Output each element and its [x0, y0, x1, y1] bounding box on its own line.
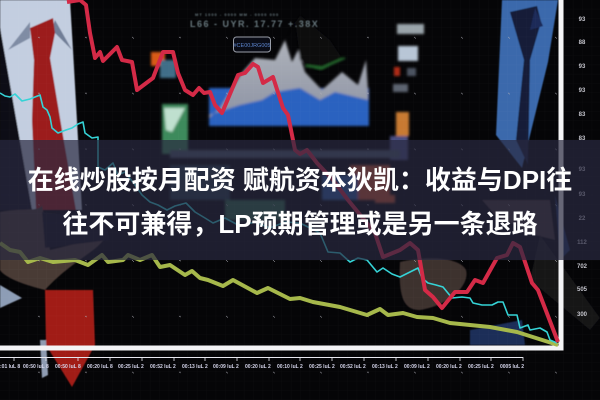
x axis: 00:20 luL 2 [245, 364, 271, 370]
x axis: 00:13 luL 2 [182, 364, 208, 370]
title: 往不可兼得，LP预期管理或是另一条退路 [62, 209, 538, 239]
y axis labels: 702 [577, 264, 588, 270]
x axis: 00:20 luL 2 [436, 364, 462, 370]
y axis labels: 88 [579, 40, 586, 46]
x axis: 00:20 luL 8 [87, 364, 113, 370]
y axis labels: 93 [579, 192, 586, 198]
line: red [67, 0, 558, 342]
x axis: 00:50 luL 8 [23, 364, 49, 370]
y axis labels: 93 [579, 167, 586, 173]
trading screen [151, 15, 424, 220]
y axis labels: 112 [577, 240, 587, 246]
y axis labels: 93 [579, 64, 586, 70]
screen readout: MT 1000 - 0000 MM - 0000 000 [195, 12, 279, 17]
x axis: 00:25 luL 2 [468, 364, 494, 370]
y axis labels [577, 17, 588, 318]
x axis: :01 luL 8 [0, 364, 20, 370]
y axis labels: 93 [579, 88, 586, 94]
right businessman [400, 0, 600, 345]
line: green [0, 243, 558, 345]
screen readout [190, 12, 319, 29]
left businessman [0, 0, 110, 387]
y axis labels: 83 [579, 136, 586, 142]
x axis: 00:13 luL 2 [372, 364, 398, 370]
x axis: 00:10 luL 2 [277, 364, 303, 370]
chart tag [234, 37, 270, 52]
x axis [0, 357, 524, 370]
y axis labels: 22 [579, 216, 586, 222]
x axis: 00:25 luL 2 [309, 364, 335, 370]
x axis: 00:09 luL 2 [404, 364, 430, 370]
title: 在线炒股按月配资 赋航资本狄凯：收益与DPI往 [28, 165, 572, 195]
y axis labels: 93 [579, 17, 586, 23]
x axis: 00:25 luL 2 [118, 364, 144, 370]
screen readout: L66 - UYR. 17.77 +.38X [190, 19, 319, 29]
x axis: 00:09 luL 2 [213, 364, 239, 370]
y axis labels: 505 [577, 287, 588, 293]
chart tag: #CE00JRG005 [234, 43, 270, 49]
x axis: 00:52 luL 2 [340, 364, 366, 370]
x axis: 0005 luL 2 [500, 364, 524, 370]
x axis: 00:50 luL 8 [55, 364, 81, 370]
y axis labels: 83 [579, 112, 586, 118]
y axis labels: 300 [577, 312, 588, 318]
title [28, 165, 572, 239]
x axis: 00:52 luL 2 [150, 364, 176, 370]
title band [0, 140, 600, 260]
line: cyan [0, 93, 557, 343]
